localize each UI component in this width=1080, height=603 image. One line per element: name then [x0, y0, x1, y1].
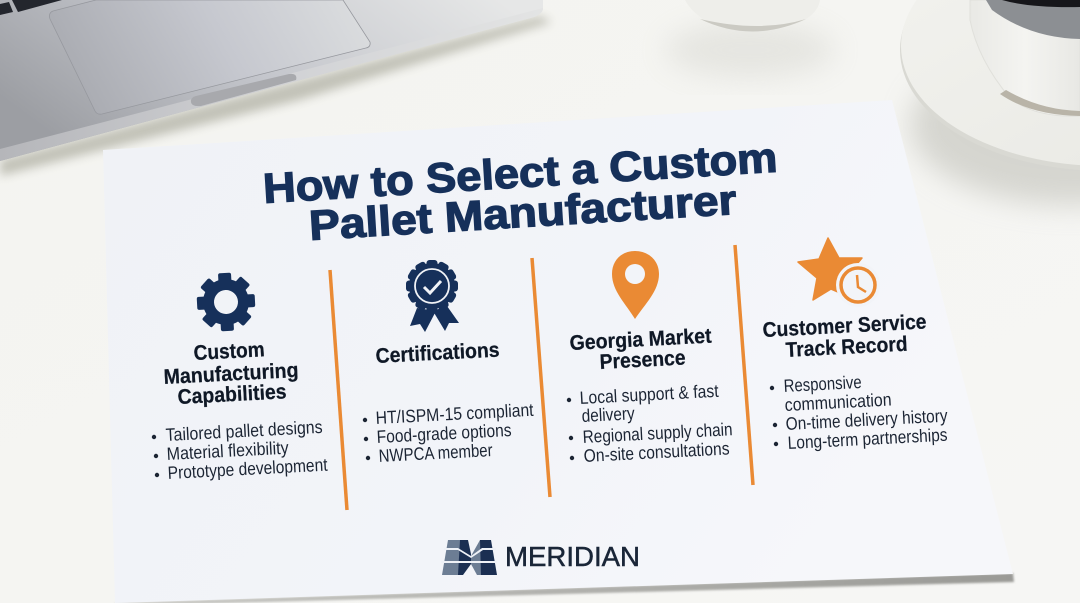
logo: meridian: [441, 540, 640, 575]
heading: Capabilities: [177, 380, 287, 409]
bullet list: [770, 372, 948, 453]
bullet list: [152, 417, 328, 483]
heading: Georgia Market: [569, 325, 712, 355]
laptop: [0, 0, 552, 176]
panel: georgia market presence: [567, 251, 733, 466]
bullet list: NWPCA member: [378, 440, 493, 466]
bullet list: Local support & fast: [579, 381, 719, 408]
bullet list: Material flexibility: [166, 438, 289, 464]
icon: map pin: [612, 251, 659, 319]
bullet list: Prototype development: [167, 455, 328, 483]
heading: Presence: [599, 347, 686, 374]
panel: custom manufacturing: [152, 272, 328, 483]
paper sheet: [103, 100, 1014, 603]
bullet list: Food-grade options: [376, 420, 512, 447]
bullet list: delivery: [581, 403, 635, 426]
panel: customer service: [762, 238, 948, 453]
bullet list: [567, 381, 733, 466]
coffee cup and saucer: [900, 0, 1080, 205]
small mug at top: [665, 0, 835, 78]
title: How to Select a Custom: [262, 134, 779, 212]
heading: Track Record: [785, 333, 908, 362]
heading: Custom: [193, 338, 265, 365]
icon: rosette badge: [406, 260, 459, 332]
heading: Certifications: [375, 339, 500, 368]
heading: Customer Service: [762, 310, 927, 342]
bullet list: communication: [784, 389, 892, 415]
divider 3: [735, 245, 753, 485]
title: Pallet Manufacturer: [308, 176, 738, 249]
icon: gear: [196, 272, 256, 332]
divider 1: [330, 270, 347, 510]
logo wordmark: MERIDIAN: [505, 541, 640, 572]
bullet list: Regional supply chain: [582, 419, 733, 447]
laptop notch: [191, 74, 296, 106]
bullet list: Tailored pallet designs: [165, 417, 323, 445]
icon: star with clock: [798, 238, 880, 307]
bullet list: On-site consultations: [583, 438, 730, 466]
heading: [762, 310, 927, 362]
heading: [163, 338, 299, 409]
bullet list: [363, 400, 534, 466]
heading: Manufacturing: [163, 359, 299, 389]
divider 2: [532, 258, 550, 497]
title: [262, 134, 779, 249]
keyboard keys: [0, 0, 62, 15]
bullet list: Long-term partnerships: [787, 425, 948, 453]
trackpad: [49, 0, 370, 114]
bullet list: On-time delivery history: [785, 406, 948, 434]
logo mark: [441, 540, 497, 575]
bullet list: Responsive: [783, 372, 862, 396]
bullet list: HT/ISPM-15 compliant: [375, 400, 534, 428]
panel: certifications: [363, 260, 534, 466]
heading: [569, 325, 712, 374]
